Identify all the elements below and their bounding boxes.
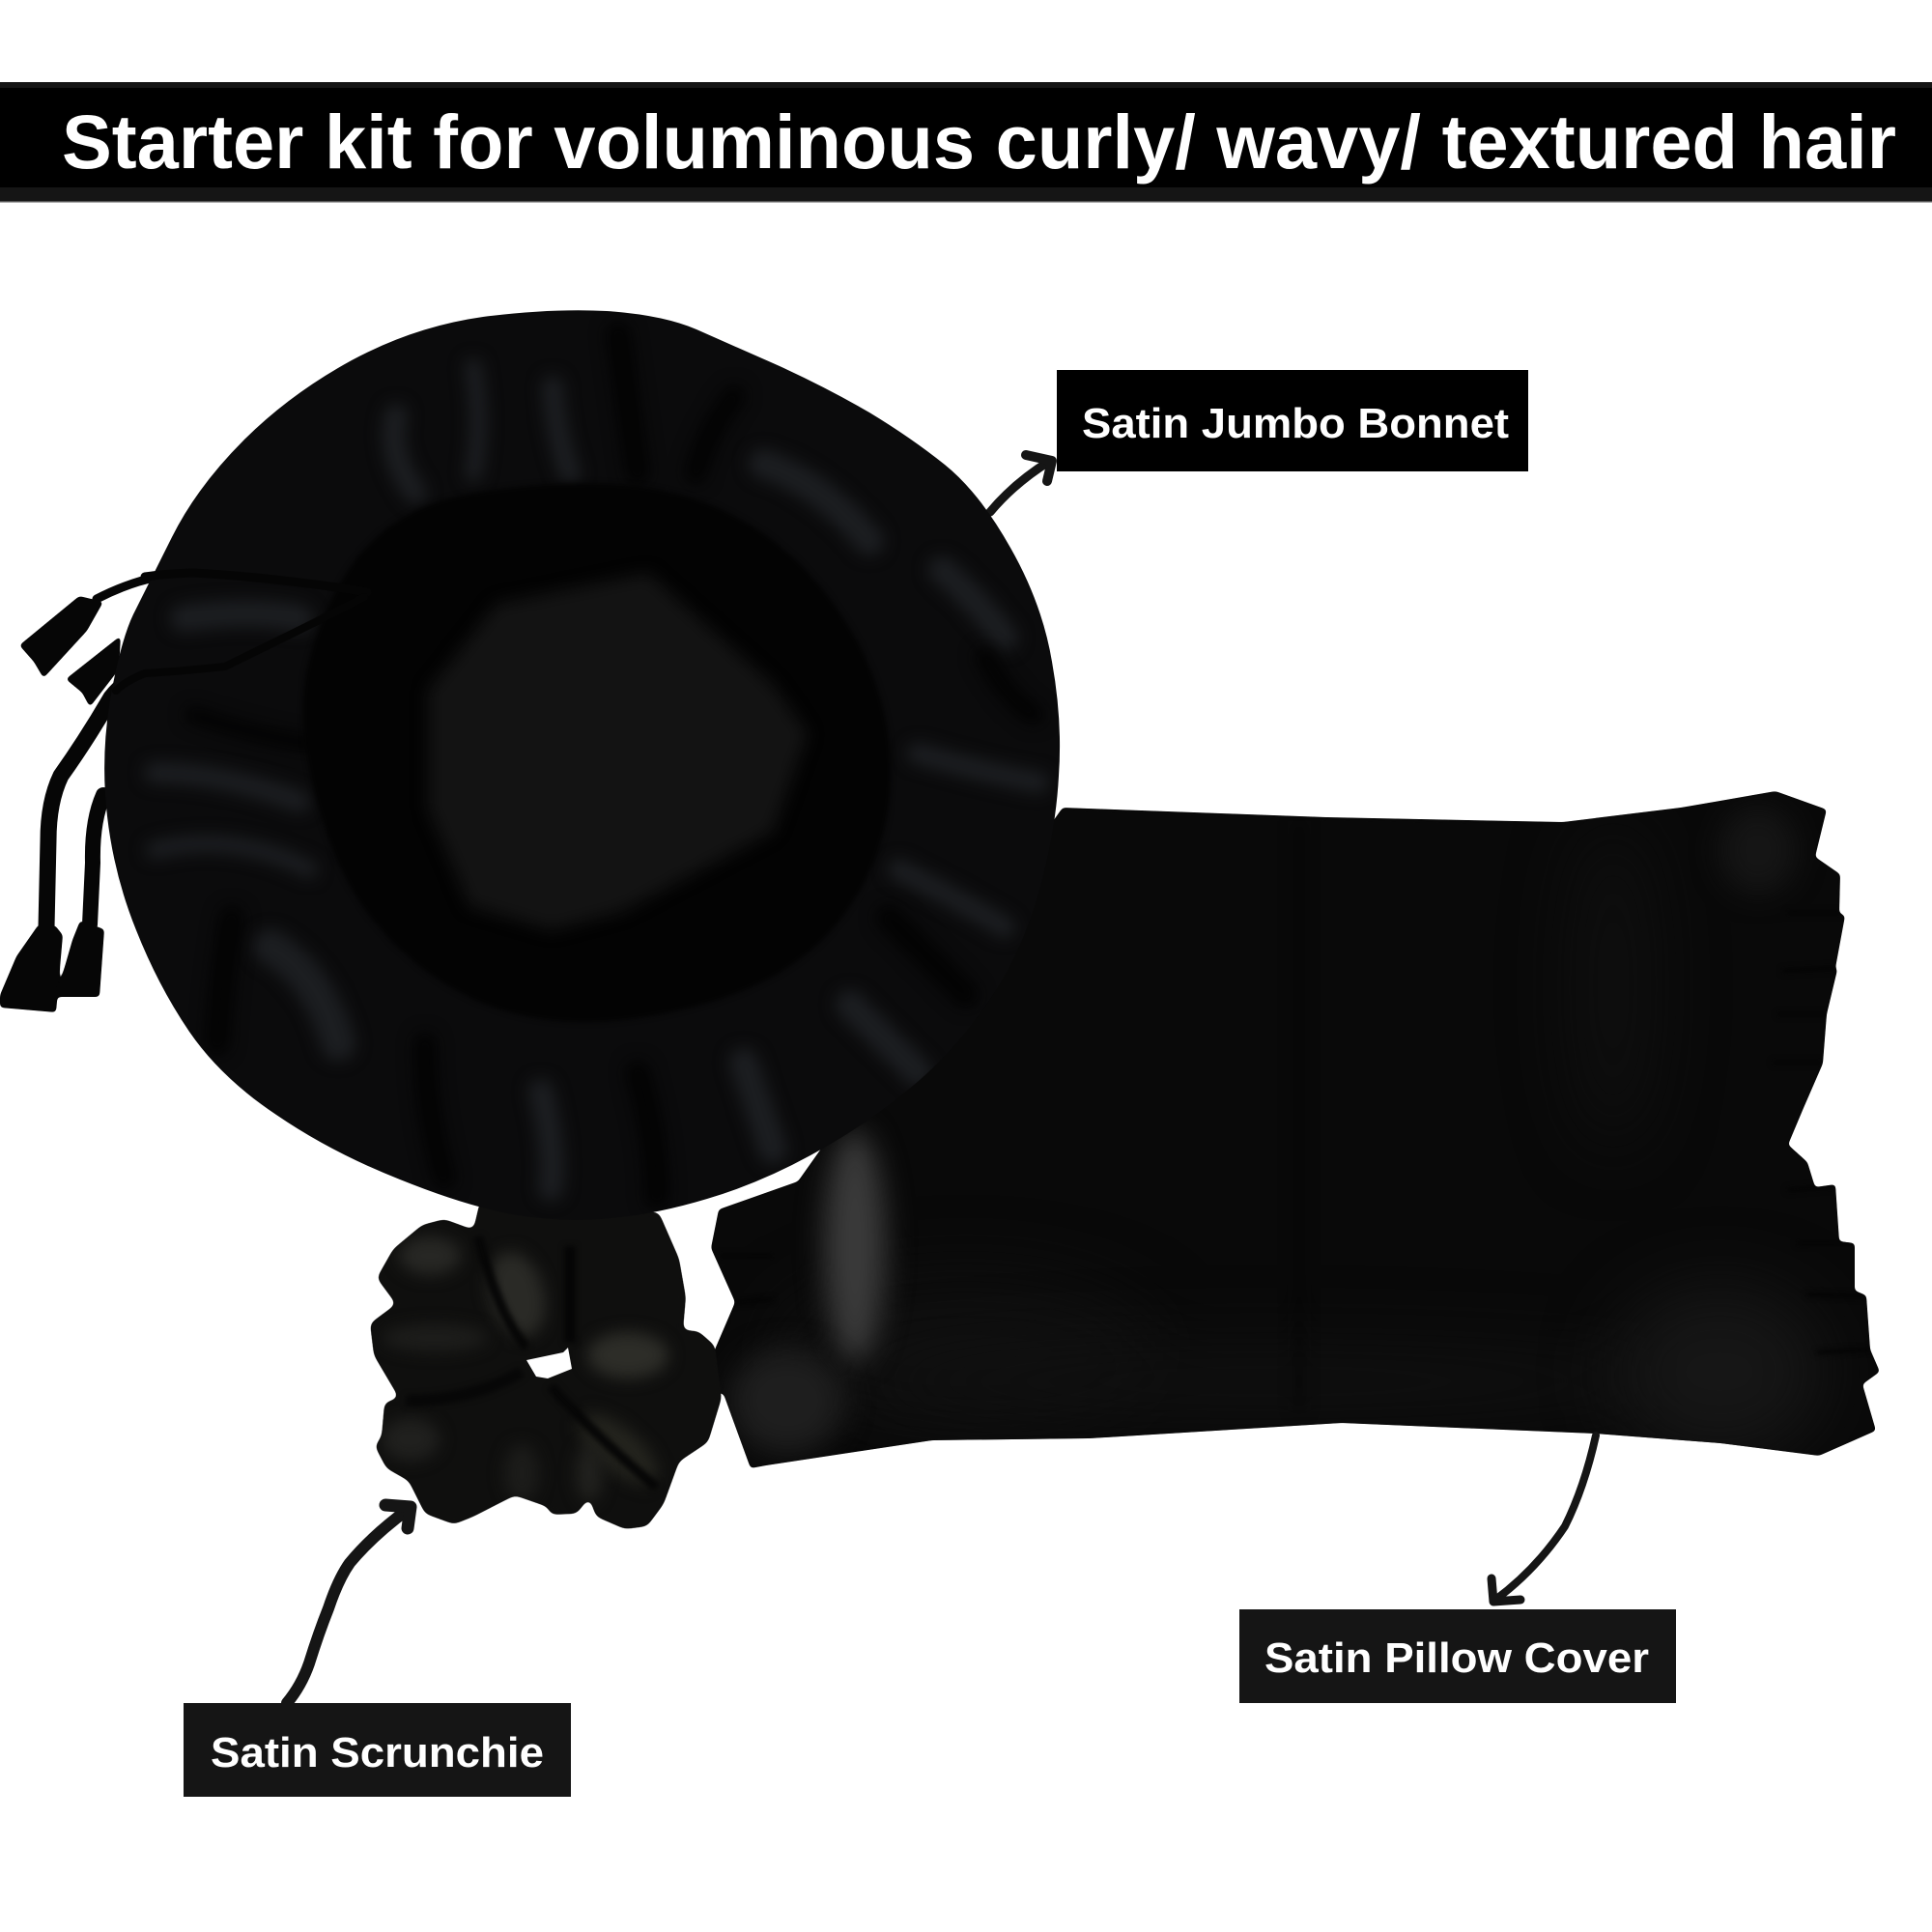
- label: Satin Pillow Cover: Satin Pillow Cover: [1264, 1634, 1649, 1682]
- arrow: scrunchie label: [287, 1505, 411, 1703]
- label: Satin Scrunchie: [184, 1703, 571, 1797]
- label: Satin Jumbo Bonnet: [1057, 370, 1528, 471]
- pillow cover: [699, 791, 1880, 1468]
- title text: Starter kit for voluminous curly/ wavy/ textured hair: [62, 99, 1896, 185]
- bonnet satin folds: [155, 333, 1038, 1198]
- bonnet crown: [428, 573, 808, 930]
- scrunchie: [370, 1201, 722, 1529]
- label: Satin Jumbo Bonnet: Satin Jumbo Bonnet: [1082, 400, 1509, 447]
- bonnet: [104, 310, 1060, 1220]
- tie tips: [0, 596, 121, 1012]
- bonnet ties: [0, 573, 367, 1012]
- bonnet velvet band: [303, 483, 891, 1022]
- label: Satin Pillow Cover: [1239, 1609, 1676, 1703]
- arrow: pillow label: [1492, 1435, 1596, 1602]
- label: Satin Scrunchie: Satin Scrunchie: [211, 1729, 544, 1776]
- arrow: bonnet label: [990, 455, 1052, 512]
- bonnet drawstring on band: [116, 573, 367, 691]
- scrunchie centre hole: [526, 1348, 572, 1378]
- title banner: [0, 82, 1932, 203]
